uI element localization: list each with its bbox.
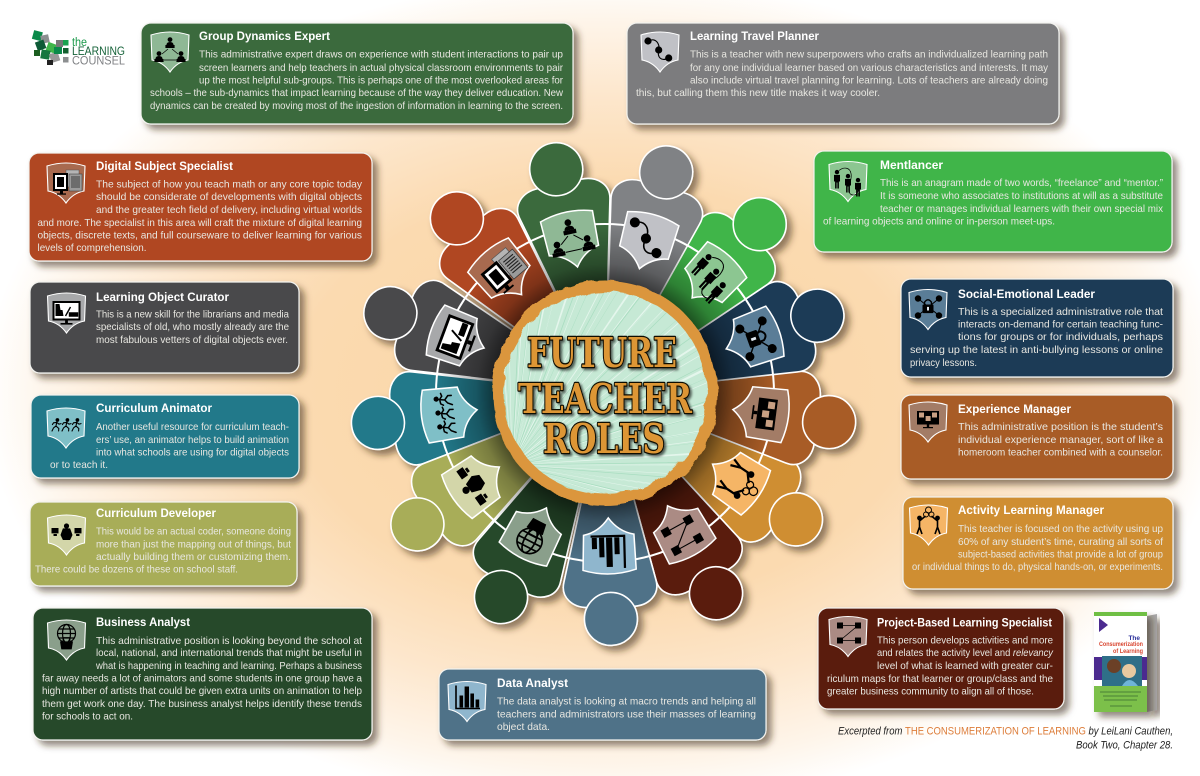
person: learning travel planner [584, 134, 718, 319]
icon: globe and basket [48, 620, 86, 660]
text: developer body [35, 526, 291, 576]
role shields around the wheel [418, 207, 792, 575]
text: animator body [50, 422, 289, 471]
text: curator body: specialists of old, who mostly already are the [96, 322, 289, 333]
title: future teacher roles: TEACHER [518, 375, 693, 423]
wheel of future teacher roles [346, 133, 861, 647]
text: data analyst body: teachers and administrators use their masses of learning [497, 710, 756, 720]
heading: curriculum developer: Curriculum Developer [96, 506, 216, 520]
icon: two active figures [910, 505, 948, 545]
heading: social-emotional leader: Social-Emotional Leader [958, 287, 1095, 301]
text: digital subject body: and more. The specialist in this area will craft the mixture of digital learning [38, 218, 362, 229]
text: activity manager body [912, 524, 1163, 573]
title: future teacher roles: FUTURE [527, 329, 677, 377]
shield: travel planner [614, 208, 680, 276]
panel: experience manager [901, 395, 1173, 479]
central circle with rays [492, 280, 719, 506]
shield: activity manager [698, 442, 774, 517]
book cover: The Consumerization of Learning [1094, 612, 1157, 712]
logo: The Learning Counsel [32, 30, 126, 68]
person: business analyst [447, 452, 606, 642]
person: digital subject specialist [404, 168, 582, 355]
heading: learning object curator: Learning Object Curator [96, 290, 229, 304]
text: project-based body: This person develops activities and more [877, 636, 1053, 646]
text: travel planner body [636, 50, 1049, 99]
excerpt credit: Book Two, Chapter 28. [1076, 740, 1173, 752]
text: social-emotional body: privacy lessons. [910, 358, 977, 369]
person: experience manager [688, 358, 861, 472]
text: experience manager body: This administrative position is the student’s [958, 422, 1163, 433]
excerpt credit: Excerpted from THE CONSUMERIZATION OF LEARNING by LeiLani Cauthen, [838, 726, 1173, 738]
text: activity manager body: 60% of any student’s time, curating all sorts of [958, 537, 1163, 548]
person: curriculum developer [369, 406, 558, 578]
text: group dynamics body: screen learners and help teachers in actual physical classroom environments to pair [199, 63, 564, 74]
shield: group dynamics [540, 207, 604, 273]
panel: social-emotional leader [901, 279, 1173, 377]
icon: lock network [909, 290, 947, 330]
text: experience manager body: individual experience manager, sort of like a [958, 435, 1163, 446]
text: digital subject body: The subject of how you teach math or any core topic today [96, 180, 363, 190]
shield: business analyst [497, 496, 570, 570]
text: curator body: most fabulous vetters of digital objects ever. [96, 335, 288, 346]
text: business analyst body: them get work one day. The business analyst helps identify these trends [42, 699, 362, 710]
person: group dynamics expert [505, 133, 632, 315]
shield: digital subject [465, 235, 542, 312]
panel: digital subject specialist [29, 153, 372, 261]
text: curator body: This is a new skill for the librarians and media [96, 310, 289, 320]
book cover: The Consumerization of Learning: of Learning [1113, 649, 1143, 655]
text: travel planner body: also include virtual travel planning for learning. Lots of teachers are already doing [690, 76, 1048, 86]
text: project-based body: greater business community to align all of those. [827, 686, 1034, 698]
text: group dynamics body: This administrative expert draws on experience with student interactions to pair up [199, 50, 563, 60]
shield: social-emotional [717, 305, 788, 374]
book cover: The Consumerization of Learning: The [1128, 635, 1140, 642]
text: activity manager body: This teacher is focused on the activity using up [958, 524, 1163, 535]
logo: The Learning Counsel: the [72, 37, 87, 49]
person: curriculum animator [346, 358, 522, 473]
text: digital subject body [38, 180, 363, 254]
heading: digital subject specialist: Digital Subject Specialist [96, 159, 233, 173]
text: social-emotional body: tions for groups or for individuals, perhaps [958, 332, 1163, 343]
panel: activity learning manager [903, 497, 1173, 589]
text: experience manager body [958, 422, 1163, 458]
text: business analyst body: what is happening in teaching and learning. Perhaps a business [95, 661, 362, 672]
logo: The Learning Counsel: COUNSEL [72, 56, 126, 68]
text: social-emotional body: interacts on-demand for certain teaching func- [958, 320, 1163, 330]
panel: business analyst [33, 608, 372, 740]
title: future teacher roles [518, 329, 693, 463]
text: project-based body: level of what is learned with greater cur- [877, 661, 1053, 672]
heading: data analyst: Data Analyst [497, 676, 568, 690]
text: digital subject body: objects, discrete texts, and full courseware to deliver learning for various [38, 230, 362, 242]
heading: activity learning manager: Activity Learning Manager [958, 503, 1104, 517]
text: animator body: Another useful resource for curriculum teach- [96, 422, 289, 433]
shield: learning object curator [422, 304, 493, 373]
text: digital subject body: and the greater tech field of delivery, including virtual worlds [96, 205, 362, 216]
text: business analyst body: high number of artists that could be given extra units on animation to help [42, 686, 362, 697]
text: group dynamics body [150, 50, 564, 112]
text: group dynamics body: schools – the sub-dynamics that impact learning because of the way they deliver education. New [150, 88, 564, 99]
icon: monitor with people [909, 402, 947, 442]
shield: mentlancer [673, 239, 750, 316]
shield: data analyst [582, 517, 636, 575]
text: business analyst body: This administrative position is looking beyond the school at [96, 636, 362, 647]
panel: mentlancer [814, 151, 1172, 252]
person: learning object curator [349, 260, 537, 405]
text: travel planner body: This is a teacher with new superpowers who crafts an individualized learning path [690, 50, 1048, 60]
text: business analyst body: far away needs a lot of animators and some students in one group have a [42, 674, 362, 684]
heading: learning travel planner: Learning Travel Planner [690, 29, 819, 43]
heading: project-based learning specialist: Project-Based Learning Specialist [877, 616, 1052, 630]
text: animator body: or to teach it. [50, 460, 108, 471]
person: project-based learning specialist [608, 449, 770, 639]
text: travel planner body: for any one individual learner based on various characteristics and interests. It may [690, 63, 1049, 74]
person: data analyst [561, 482, 658, 647]
heading: group dynamics expert: Group Dynamics Expert [199, 29, 330, 43]
text: data analyst body: object data. [497, 722, 550, 733]
excerpt credit [838, 726, 1173, 752]
text: mentlancer body: of learning objects and online or in-person meet-ups. [823, 216, 1055, 228]
text: mentlancer body: teacher or manages individual learners with their own special mix [880, 204, 1163, 215]
panel: curriculum developer [30, 502, 297, 586]
text: mentlancer body: It is someone who associates to institutions at will as a substitute [880, 191, 1163, 202]
logo: The Learning Counsel: LEARNING [72, 46, 125, 58]
title: future teacher roles: ROLES [543, 415, 665, 463]
icon: bar chart [448, 682, 486, 722]
text: project-based body: and relates the activity level and relevancy [877, 648, 1054, 659]
heading: experience manager: Experience Manager [958, 402, 1071, 416]
icon: developer [48, 515, 86, 555]
heading: curriculum animator: Curriculum Animator [96, 401, 212, 415]
text: social-emotional body: This is a specialized administrative role that [958, 307, 1163, 318]
person: mentlancer [631, 173, 812, 358]
panel: learning object curator [30, 282, 299, 373]
shield: curriculum animator [418, 383, 481, 444]
text: data analyst body [497, 696, 756, 733]
text: travel planner body: this, but calling them this new title makes it way cooler. [636, 88, 880, 99]
shield: experience manager [729, 383, 792, 443]
person: social-emotional leader [674, 263, 858, 406]
shield: project based [644, 493, 718, 568]
text: mentlancer body [823, 178, 1164, 228]
icon: digital subject [47, 163, 85, 203]
panel: data analyst [439, 669, 766, 740]
person: activity learning manager [654, 404, 844, 573]
text: animator body: ers’ use, an animator helps to build animation [96, 435, 289, 446]
icon: mentlancer people [829, 162, 867, 202]
text: digital subject body: levels of comprehension. [38, 243, 146, 254]
text: curator body [96, 310, 289, 346]
text: project-based body [827, 636, 1054, 698]
text: developer body: There could be dozens of these on school staff. [35, 564, 238, 576]
text: digital subject body: should be considerate of developments with digital objects [96, 192, 362, 203]
text: data analyst body: The data analyst is looking at macro trends and helping all [497, 696, 756, 708]
heading: mentlancer: Mentlancer [880, 158, 943, 172]
shield: curriculum developer [438, 445, 515, 521]
text: animator body: into what schools are using for digital objects [96, 448, 289, 458]
text: group dynamics body: up the most helpful sub-groups. This is perhaps one of the most overlooked areas for [199, 76, 564, 86]
icon: travel path [641, 32, 679, 72]
book cover: The Consumerization of Learning: Consumerization [1099, 642, 1143, 648]
panel: group dynamics expert [141, 23, 573, 124]
panel: curriculum animator [31, 395, 299, 478]
text: business analyst body [42, 636, 362, 722]
text: activity manager body: or individual things to do, physical hands-on, or experiments. [912, 562, 1163, 573]
text: experience manager body: homeroom teacher combined with a counselor. [958, 448, 1163, 458]
text: developer body: actually building them or customizing them. [96, 552, 291, 563]
text: business analyst body: local, national, and international trends that might be useful in [96, 648, 362, 659]
text: social-emotional body [910, 307, 1163, 369]
text: project-based body: riculum maps for that learner or group/class and the [827, 674, 1053, 685]
heading: business analyst: Business Analyst [96, 615, 190, 629]
text: developer body: more than just the mapping out of things, but [96, 540, 291, 550]
text: group dynamics body: dynamics can be created by moving most of the ingestion of information in learning to the screen. [150, 101, 563, 112]
panel: learning travel planner [627, 23, 1059, 124]
panel: project-based learning specialist [818, 608, 1064, 709]
icon: group dynamics [151, 32, 189, 72]
people figures forming the wheel [346, 133, 861, 647]
icon: curator [48, 293, 86, 333]
icon: connected squares [829, 616, 867, 656]
text: business analyst body: for schools to act on. [42, 712, 133, 722]
text: mentlancer body: This is an anagram made of two words, “freelance” and “mentor.” [880, 178, 1164, 189]
text: developer body: This would be an actual coder, someone doing [96, 526, 291, 538]
icon: animator runners [47, 408, 85, 448]
text: activity manager body: subject-based activities that provide a lot of group [958, 550, 1163, 560]
text: social-emotional body: serving up the latest in anti-bullying lessons or online [910, 345, 1163, 356]
